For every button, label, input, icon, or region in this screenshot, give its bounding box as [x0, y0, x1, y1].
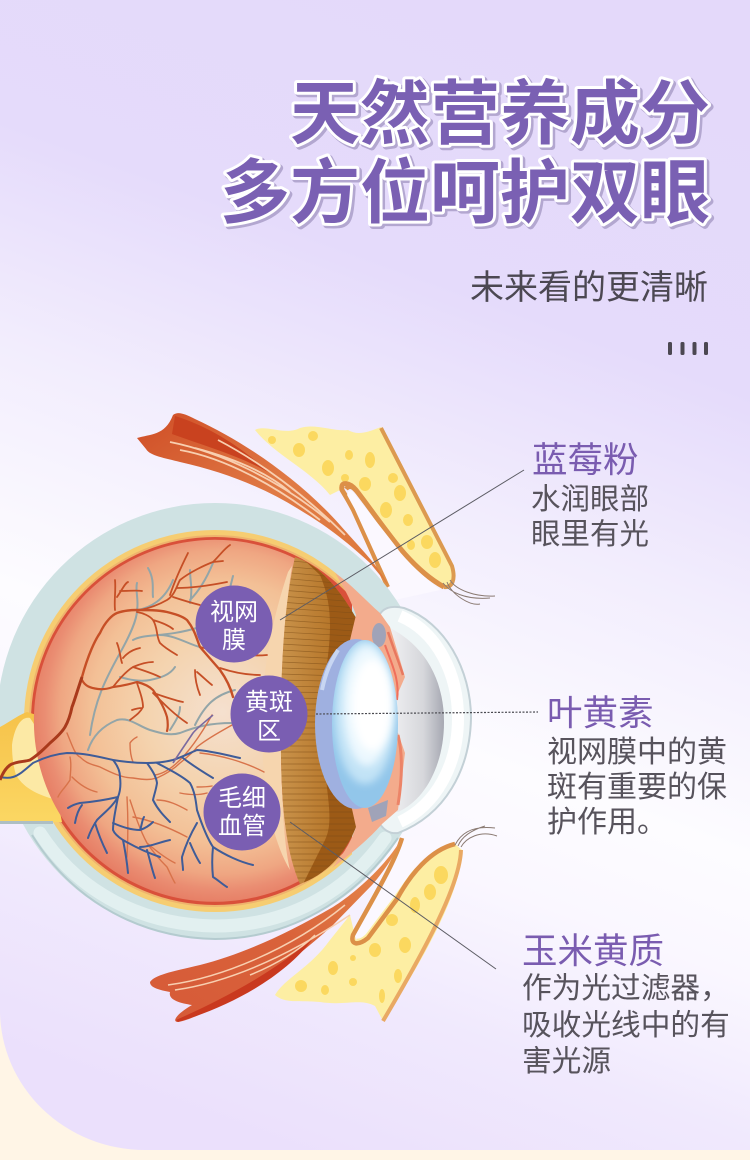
iris [385, 627, 444, 812]
upper eyelid and muscle [137, 413, 495, 604]
choroid bands [24, 530, 352, 912]
callout: 蓝莓粉: 水润眼部 [531, 483, 649, 516]
badge: 视网膜 [196, 586, 272, 662]
callout: 玉米黄质: 作为光过滤器， [522, 972, 730, 1005]
veins blue [0, 750, 253, 887]
callout: 叶黄素: 视网膜中的黄 [547, 736, 727, 769]
title: 多方位呵护双眼 [220, 154, 710, 232]
retinal veins gray [88, 563, 235, 750]
badge: 毛细血管 [204, 774, 280, 850]
lower eyelid and muscle [150, 826, 497, 1022]
extraocular muscle upper [137, 413, 388, 585]
callout: 叶黄素: 斑有重要的保 [547, 771, 727, 804]
blue-purple branch [173, 715, 213, 763]
optic nerve [0, 712, 62, 824]
title: 天然营养成分 [290, 75, 710, 153]
callout: 玉米黄质: 玉米黄质 [522, 931, 664, 971]
title: 多方位呵护双眼 [222, 156, 712, 234]
callout: 蓝莓粉 [531, 440, 649, 551]
title: 天然营养成分 [292, 77, 712, 155]
callout: 叶黄素: 叶黄素 [547, 693, 654, 733]
badge: 黄斑区: 黄斑 [245, 689, 293, 716]
thin red capillaries [58, 715, 264, 883]
subtitle: 未来看的更清晰 [470, 269, 708, 307]
badge: 黄斑区: 区 [257, 718, 281, 745]
ciliary body tissue [332, 573, 405, 868]
callout: 蓝莓粉: 蓝莓粉 [532, 440, 639, 480]
badge: 黄斑区 [230, 676, 308, 752]
callout: 叶黄素 [547, 693, 727, 839]
badge: 毛细血管: 血管 [218, 813, 266, 840]
cornea [380, 607, 471, 833]
central retinal artery [0, 677, 82, 780]
callout: 叶黄素: 护作用。 [547, 806, 667, 839]
tick marks [668, 342, 708, 355]
icon: eyelashes lower [455, 826, 497, 847]
retina [34, 540, 301, 902]
lens [315, 639, 398, 809]
arteries red [82, 545, 267, 731]
callout: 玉米黄质: 吸收光线中的有 [522, 1009, 730, 1042]
badge: 毛细血管: 毛细 [218, 785, 266, 812]
sclera [0, 503, 433, 939]
callout: 玉米黄质 [522, 931, 730, 1078]
icon: eyelashes upper [443, 580, 495, 604]
ciliary muscle [280, 557, 356, 884]
badge: 视网膜: 视网 [210, 599, 258, 626]
eyeball cross-section [0, 503, 471, 939]
retina pale rim [262, 566, 292, 870]
callout: 玉米黄质: 害光源 [522, 1045, 611, 1078]
badge: 视网膜: 膜 [222, 627, 246, 654]
callout: 蓝莓粉: 眼里有光 [531, 518, 649, 551]
leader lines [280, 470, 538, 969]
extraocular muscle lower [150, 838, 402, 1022]
title [220, 75, 712, 234]
